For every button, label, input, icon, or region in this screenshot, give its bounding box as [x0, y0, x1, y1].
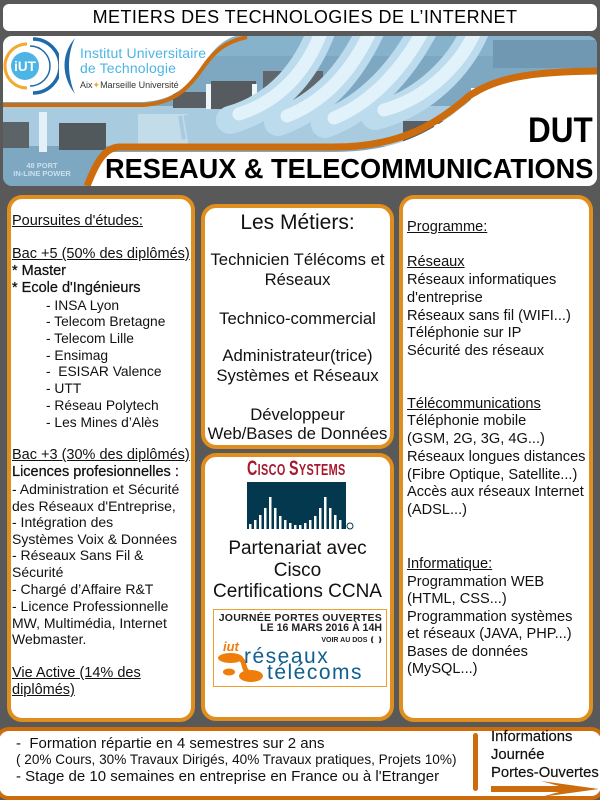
section: réseaux: Réseaux sans fil (WIFI...): [407, 308, 571, 324]
section: télécommunications: [407, 396, 585, 518]
section: informatique: Bases de données: [407, 644, 528, 660]
logo: university name: Institut Universitaire: [80, 45, 206, 61]
job list: Développeur: [250, 405, 345, 424]
bac +5 list: - Telecom Bretagne: [46, 314, 165, 329]
logo: university name: Aix✦Marseille Université: [80, 80, 179, 90]
cable connectors: [178, 114, 188, 140]
section: télécommunications: Accès aux réseaux Internet: [407, 484, 584, 500]
partnership text: [213, 538, 382, 602]
open day ad: télécoms: [267, 661, 363, 684]
section: réseaux: Réseaux: [407, 254, 465, 270]
section: télécommunications: (ADSL...): [407, 502, 467, 518]
logo: university name: de Technologie: [80, 60, 176, 76]
Cisco logo: [247, 457, 354, 530]
section: informatique: Informatique:: [407, 556, 492, 572]
port label: 48 PORT: [26, 161, 58, 170]
section: réseaux: [407, 254, 571, 359]
training summary: - Formation répartie en 4 semestres sur 2 ans: [16, 735, 324, 752]
section: informatique: Programmation WEB: [407, 574, 544, 590]
partnership text: Cisco: [274, 560, 321, 581]
section: informatique: Programmation systèmes: [407, 609, 572, 625]
section: réseaux: Sécurité des réseaux: [407, 343, 544, 359]
banner: IN-LINE POWER: [13, 169, 71, 178]
vie active: Vie Active (14% des: [12, 665, 141, 681]
bac +3 list: - Licence Professionnelle: [12, 598, 168, 614]
panel: programme: [399, 195, 593, 722]
training summary: ( 20% Cours, 30% Travaux Dirigés, 40% Travaux pratiques, Projets 10%): [16, 752, 456, 767]
open day ad: LE 16 MARS 2016 À 14H: [260, 622, 382, 634]
bac +5 list: - Telecom Lille: [46, 331, 134, 346]
bac +3 list: - Chargé d’Affaire R&T: [12, 581, 153, 597]
section: informatique: [407, 556, 572, 677]
icon: arrow: [491, 781, 599, 796]
bac +5 list: - Réseau Polytech: [46, 398, 159, 413]
panel: les métiers: [201, 204, 394, 449]
training summary: - Stage de 10 semaines en entreprise en France ou à l'Etranger: [16, 768, 439, 785]
bottom title area: [85, 74, 599, 188]
title bar: METIERS DES TECHNOLOGIES DE L’INTERNET: [93, 7, 517, 27]
bac +3 list: - Administration et Sécurité: [12, 481, 179, 497]
logo: IUT emblem: iUT: [14, 59, 37, 74]
bac +5 list: - Les Mines d’Alès: [46, 415, 159, 430]
Cisco logo: CISCO SYSTEMS: [247, 457, 346, 480]
panel: partenariat Cisco: [201, 453, 394, 721]
open day info: Journée: [491, 747, 544, 763]
bac +3 list: MW, Multimédia, Internet: [12, 615, 167, 631]
training summary: [16, 735, 456, 785]
job list: Web/Bases de Données: [208, 424, 387, 443]
section: télécommunications: Réseaux longues distances: [407, 449, 585, 465]
section: télécommunications: Téléphonie mobile: [407, 413, 526, 429]
open day ad: [213, 609, 387, 687]
vie active: [12, 665, 141, 698]
switch hardware background: [3, 36, 597, 186]
bac +5 list: [12, 246, 190, 430]
métiers heading: Les Métiers:: [240, 211, 355, 234]
bac +5 list: - Ensimag: [46, 348, 108, 363]
bac +3 list: Webmaster.: [12, 631, 86, 647]
section: réseaux: d'entreprise: [407, 290, 483, 306]
heading: Réseaux et Télécommunications: RESEAUX & TELECOMMUNICATIONS: [105, 153, 593, 184]
bac +5 list: - ESISAR Valence: [46, 364, 162, 379]
bac +3 list: [12, 447, 190, 647]
section: télécommunications: Télécommunications: [407, 396, 541, 412]
bac +5 list: - INSA Lyon: [46, 298, 119, 313]
top-left logo area: [1, 34, 243, 102]
job list: Technico-commercial: [219, 309, 376, 328]
section: télécommunications: (GSM, 2G, 3G, 4G...): [407, 431, 545, 447]
bac +5 list: * Master: [12, 263, 66, 279]
open day ad: iut: [223, 639, 239, 654]
section: informatique: et réseaux (JAVA, PHP...): [407, 626, 572, 642]
bac +3 list: - Réseaux Sans Fil &: [12, 547, 144, 563]
title bar: [3, 4, 597, 31]
partnership text: Partenariat avec: [228, 538, 367, 559]
section: réseaux: Réseaux informatiques: [407, 272, 556, 288]
open day ad: réseaux: [244, 645, 329, 668]
cable highlights: [239, 21, 479, 118]
divider bar: [473, 733, 478, 791]
bac +3 list: Licences profesionnelles :: [12, 464, 179, 480]
panel: poursuites d'études: [7, 195, 195, 722]
programme heading: Programme:: [407, 219, 487, 235]
open day info: [491, 729, 599, 781]
network cables: [230, 21, 479, 124]
open day ad: VOIR AU DOS ❪ ❫: [321, 637, 383, 644]
logo: IUT emblem: [4, 37, 59, 95]
job list: [208, 250, 387, 443]
job list: Systèmes et Réseaux: [216, 366, 379, 385]
job list: Administrateur(trice): [222, 346, 373, 365]
bac +5 list: * Ecole d'Ingénieurs: [12, 280, 141, 296]
bac +3 list: des Réseaux d'Entreprise,: [12, 498, 176, 514]
bac +3 list: Sécurité: [12, 564, 63, 580]
section: télécommunications: (Fibre Optique, Satellite...): [407, 467, 577, 483]
vie active: diplômés): [12, 682, 75, 698]
bac +5 list: Bac +5 (50% des diplômés): [12, 246, 190, 262]
banner: [3, 36, 597, 186]
job list: Technicien Télécoms et: [210, 250, 385, 269]
bac +5 list: - UTT: [46, 381, 81, 396]
bac +3 list: Bac +3 (30% des diplômés): [12, 447, 190, 463]
bac +3 list: Systèmes Voix & Données: [12, 531, 177, 547]
job list: Réseaux: [265, 270, 330, 289]
bac +3 list: - Intégration des: [12, 514, 113, 530]
section: informatique: (HTML, CSS...): [407, 591, 507, 607]
section: réseaux: Téléphonie sur IP: [407, 325, 521, 341]
panel: bottom information bar: [0, 727, 600, 800]
open day info: Portes-Ouvertes: [491, 765, 599, 781]
open day info: Informations: [491, 729, 572, 745]
heading: DUT: DUT: [528, 111, 593, 150]
partnership text: Certifications CCNA: [213, 581, 382, 602]
open day ad: JOURNÉE PORTES OUVERTES: [219, 612, 382, 624]
studies heading: Poursuites d'études:: [12, 213, 143, 229]
logo: university name: [64, 38, 206, 94]
section: informatique: (MySQL...): [407, 661, 478, 677]
